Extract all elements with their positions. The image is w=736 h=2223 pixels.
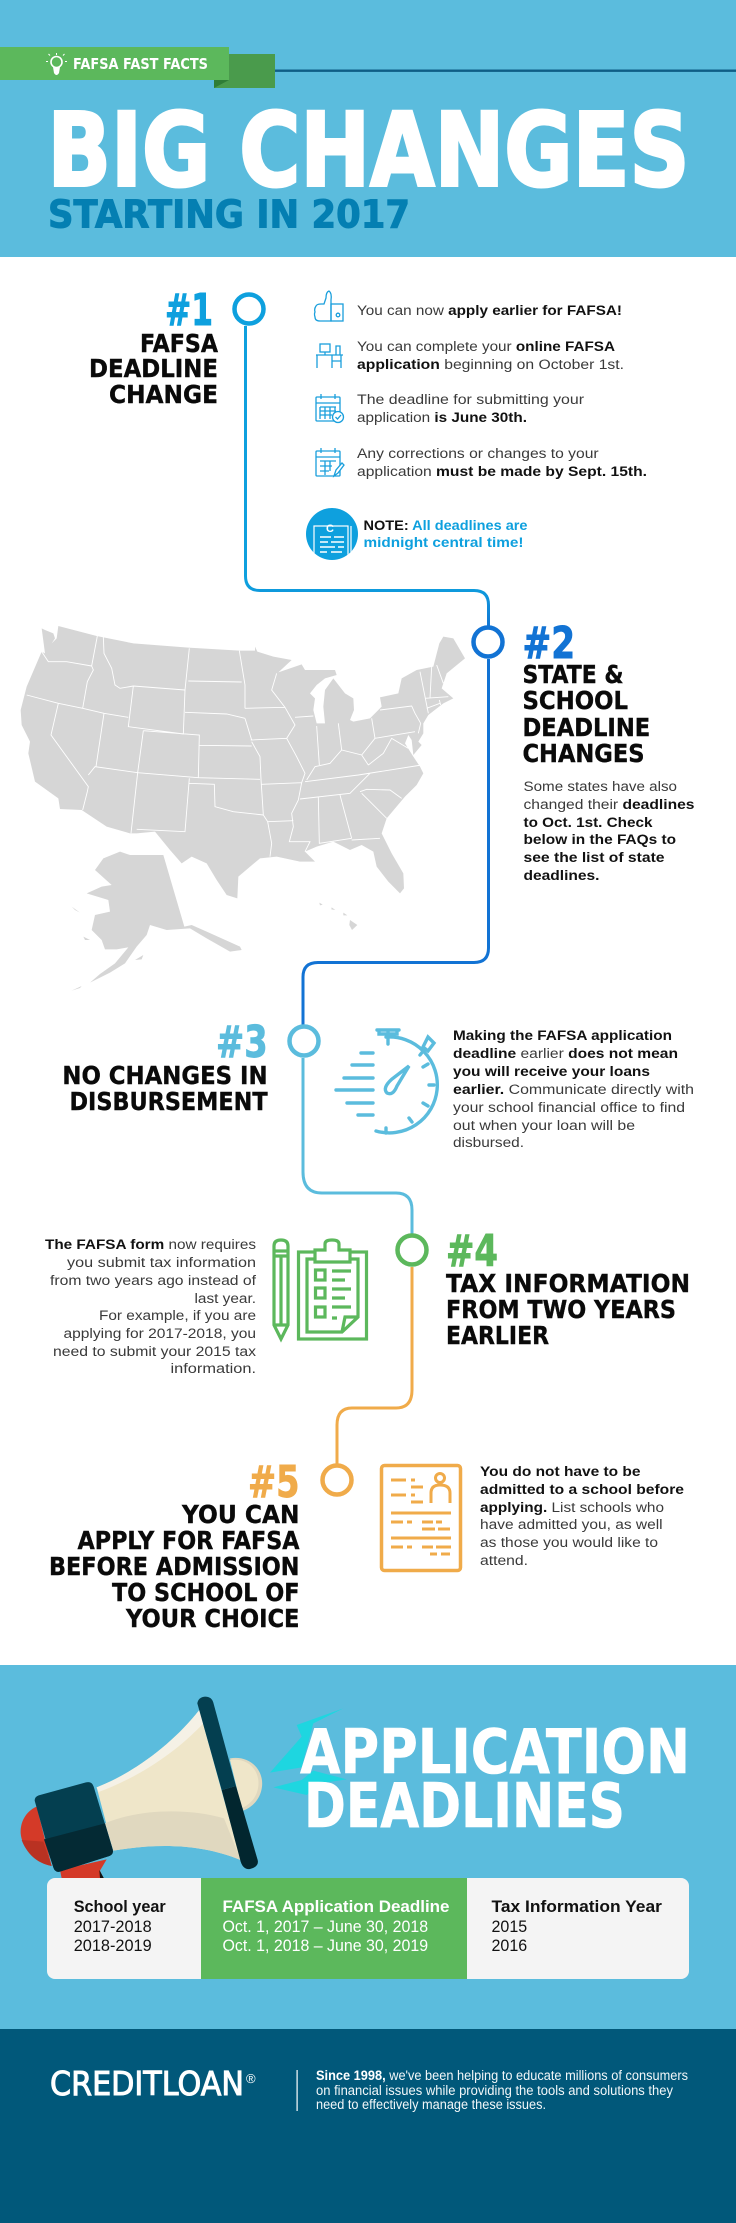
icon: megaphone [21,1697,347,1878]
text block 2: below in the FAQs to [524,832,676,848]
marker 2 [474,628,502,656]
icon: stopwatch [336,1030,437,1133]
panel: application deadlines [0,1665,736,2029]
heading 1: #1 [165,286,213,336]
column: tax information year: Tax Information Year [492,1898,662,1916]
heading 1 [89,286,218,409]
heading 5: BEFORE ADMISSION [49,1552,300,1581]
marker 4 [398,1236,426,1264]
marker 3 [290,1026,318,1056]
text block 4: information. [170,1361,256,1377]
text: corrections [357,446,647,480]
heading 5: APPLY FOR FAFSA [78,1526,300,1555]
text: about creditloan: on financial issues while providing the tools and solutions they [316,2083,673,2098]
column: tax information year: 2016 [492,1937,527,1955]
heading 2: CHANGES [522,739,644,768]
column: fafsa application deadline: Oct. 1, 2017 – June 30, 2018 [222,1918,428,1936]
text: june deadline [357,392,584,426]
text: june deadline: The deadline for submitting your [357,392,584,408]
text block 3: your school financial office to find [453,1100,685,1116]
hawaii [319,903,357,930]
icon: pencil [274,1240,288,1339]
text block 3: deadline earlier does not mean [453,1046,678,1062]
icon: application document [382,1466,460,1570]
heading 5: #5 [248,1458,300,1508]
heading 2: STATE & [522,660,624,689]
heading 5 [49,1458,300,1633]
column: school year: 2017-2018 [74,1918,152,1936]
text block 4 [45,1237,256,1377]
text block 4: from two years ago instead of [50,1273,256,1289]
section 2: state and school deadline changes [474,619,695,884]
heading 5: YOU CAN [181,1500,300,1529]
ribbon: fafsa fast facts: FAFSA FAST FACTS [73,55,208,73]
section 3: no changes in disbursement [62,1018,694,1151]
column: school year: 2018-2019 [74,1937,152,1955]
header banner [0,0,736,257]
heading 4: FROM TWO YEARS [446,1295,676,1324]
heading 4 [446,1227,690,1350]
text block 3: earlier. Communicate directly with [453,1082,694,1098]
text: corrections: Any corrections or changes to your [357,446,599,462]
text block 5: You do not have to be [480,1464,641,1480]
callout: note: NOTE: All deadlines are [364,517,528,533]
logo: CREDITLOAN [50,2065,244,2103]
icon: desk [316,344,343,368]
marker 5 [322,1466,352,1494]
text: online application: application beginning on October 1st. [357,357,624,373]
icon: note badge: C [326,523,334,535]
column: fafsa application deadline: Oct. 1, 2018 – June 30, 2019 [222,1937,428,1955]
heading 1: DEADLINE [89,354,218,383]
text block 3: disbursed. [453,1135,524,1151]
heading: application deadlines [300,1716,690,1842]
text: online application [357,339,624,373]
text: apply earlier: You can now apply earlier for FAFSA! [357,303,622,319]
text block 2: see the list of state [524,850,665,866]
icon: calendar pen [316,448,344,476]
text block 3: out when your loan will be [453,1118,635,1134]
text block 5 [480,1464,684,1569]
ribbon: fafsa fast facts [0,47,275,88]
text block 2: to Oct. 1st. Check [524,815,653,831]
text block 4: applying for 2017-2018, you [64,1326,256,1342]
heading 2: DEADLINE [522,713,650,742]
contiguous states [21,626,465,898]
column: fafsa application deadline: FAFSA Application Deadline [222,1898,450,1916]
text block 5: applying. List schools who [480,1500,664,1516]
text block 2 [524,779,695,884]
table: deadlines [47,1878,689,1979]
text block 5: attend. [480,1553,528,1569]
logo: ® [246,2071,256,2086]
text block 4: The FAFSA form now requires [45,1237,256,1253]
text: about creditloan: Since 1998, we've been helping to educate millions of consumers [316,2068,688,2083]
heading 3: NO CHANGES IN [62,1061,268,1090]
text block 4: you submit tax information [67,1255,256,1271]
text: about creditloan: need to effectively manage these issues. [316,2097,546,2112]
text block 4: For example, if you are [99,1308,256,1324]
heading 5: TO SCHOOL OF [112,1578,300,1607]
text block 5: as those you would like to [480,1535,658,1551]
heading 4: TAX INFORMATION [446,1269,690,1298]
heading 2: #2 [522,619,575,669]
heading 2 [522,619,650,768]
heading 1: CHANGE [109,380,218,409]
text: june deadline: application is June 30th. [357,410,527,426]
section 1: fafsa deadline change [89,286,647,566]
icon: calendar check [316,394,344,422]
callout: note: midnight central time! [364,534,524,550]
icon: clipboard [298,1240,366,1339]
text block 5: have admitted you, as well [480,1517,663,1533]
column: school year: School year [74,1898,166,1916]
column: school year [74,1898,166,1955]
text block 4: last year. [194,1291,256,1307]
heading: application deadlines: DEADLINES [304,1770,625,1842]
column: tax information year: 2015 [492,1918,527,1936]
icon: light bulb [46,53,67,75]
column: tax information year [492,1898,662,1955]
text: online application: You can complete your online FAFSA [357,339,615,355]
section 4: tax information [45,1227,690,1377]
text block 2: deadlines. [524,868,600,884]
text block 3 [453,1028,694,1151]
text block 5: admitted to a school before [480,1482,684,1498]
heading 4: #4 [446,1227,498,1277]
text block 2: changed their deadlines [524,797,695,813]
text: corrections: application must be made by Sept. 15th. [357,464,647,480]
footer [0,2029,736,2223]
heading 5: YOUR CHOICE [125,1604,300,1633]
heading 4: EARLIER [446,1321,549,1350]
text block 3: Making the FAFSA application [453,1028,672,1044]
text: about creditloan [316,2068,688,2112]
section 5: apply before admission [49,1458,684,1633]
column: fafsa application deadline [222,1898,450,1955]
alaska [72,852,242,991]
callout: note [364,517,528,550]
marker 1 [234,294,264,324]
heading 3: #3 [216,1018,268,1068]
text block 4: need to submit your 2015 tax [53,1344,256,1360]
text block 3: you will receive your loans [453,1064,650,1080]
icon: thumbs up [314,291,343,321]
timeline connector [246,326,488,1464]
subtitle: STARTING IN 2017 [48,192,410,236]
map of the united states [21,626,465,991]
heading 1: FAFSA [140,329,218,358]
text block 2: Some states have also [524,779,677,795]
heading 3: DISBURSEMENT [70,1087,268,1116]
heading 3 [62,1018,268,1116]
icon: note badge [306,508,358,560]
heading 2: SCHOOL [522,686,628,715]
